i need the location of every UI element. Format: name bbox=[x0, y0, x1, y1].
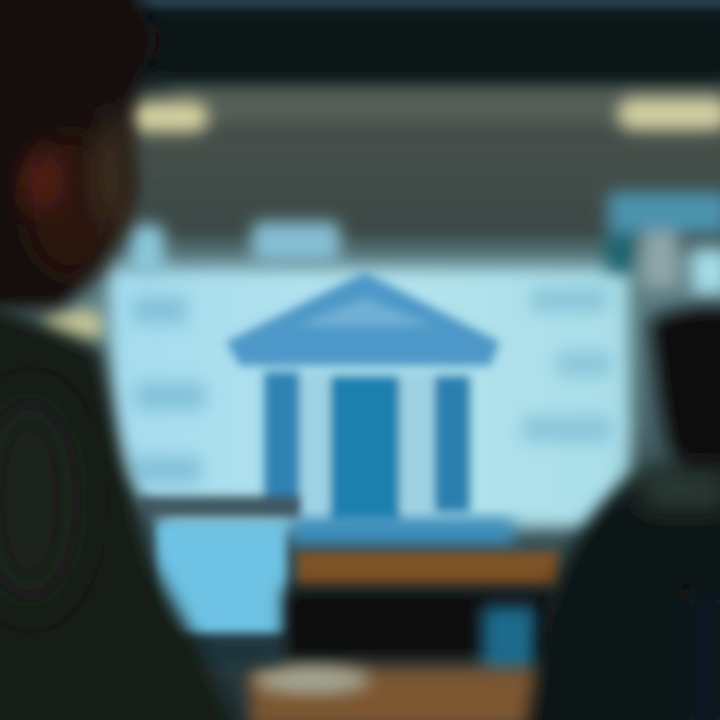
ceiling lights bbox=[44, 98, 720, 340]
person: left foreground bbox=[0, 0, 240, 720]
screen top tabs bbox=[130, 222, 340, 275]
desk bbox=[150, 552, 560, 720]
bank columns bbox=[264, 372, 470, 522]
icon: bank building bbox=[226, 272, 514, 544]
screen right text blocks bbox=[522, 288, 612, 442]
person: right foreground bbox=[525, 307, 720, 720]
right-side window and blue shapes bbox=[606, 192, 720, 294]
bank base bbox=[290, 518, 514, 544]
bank roof bbox=[226, 272, 500, 366]
screen left text blocks bbox=[132, 296, 206, 484]
panel: large blue screen bbox=[108, 222, 632, 528]
laptop bbox=[140, 496, 300, 634]
